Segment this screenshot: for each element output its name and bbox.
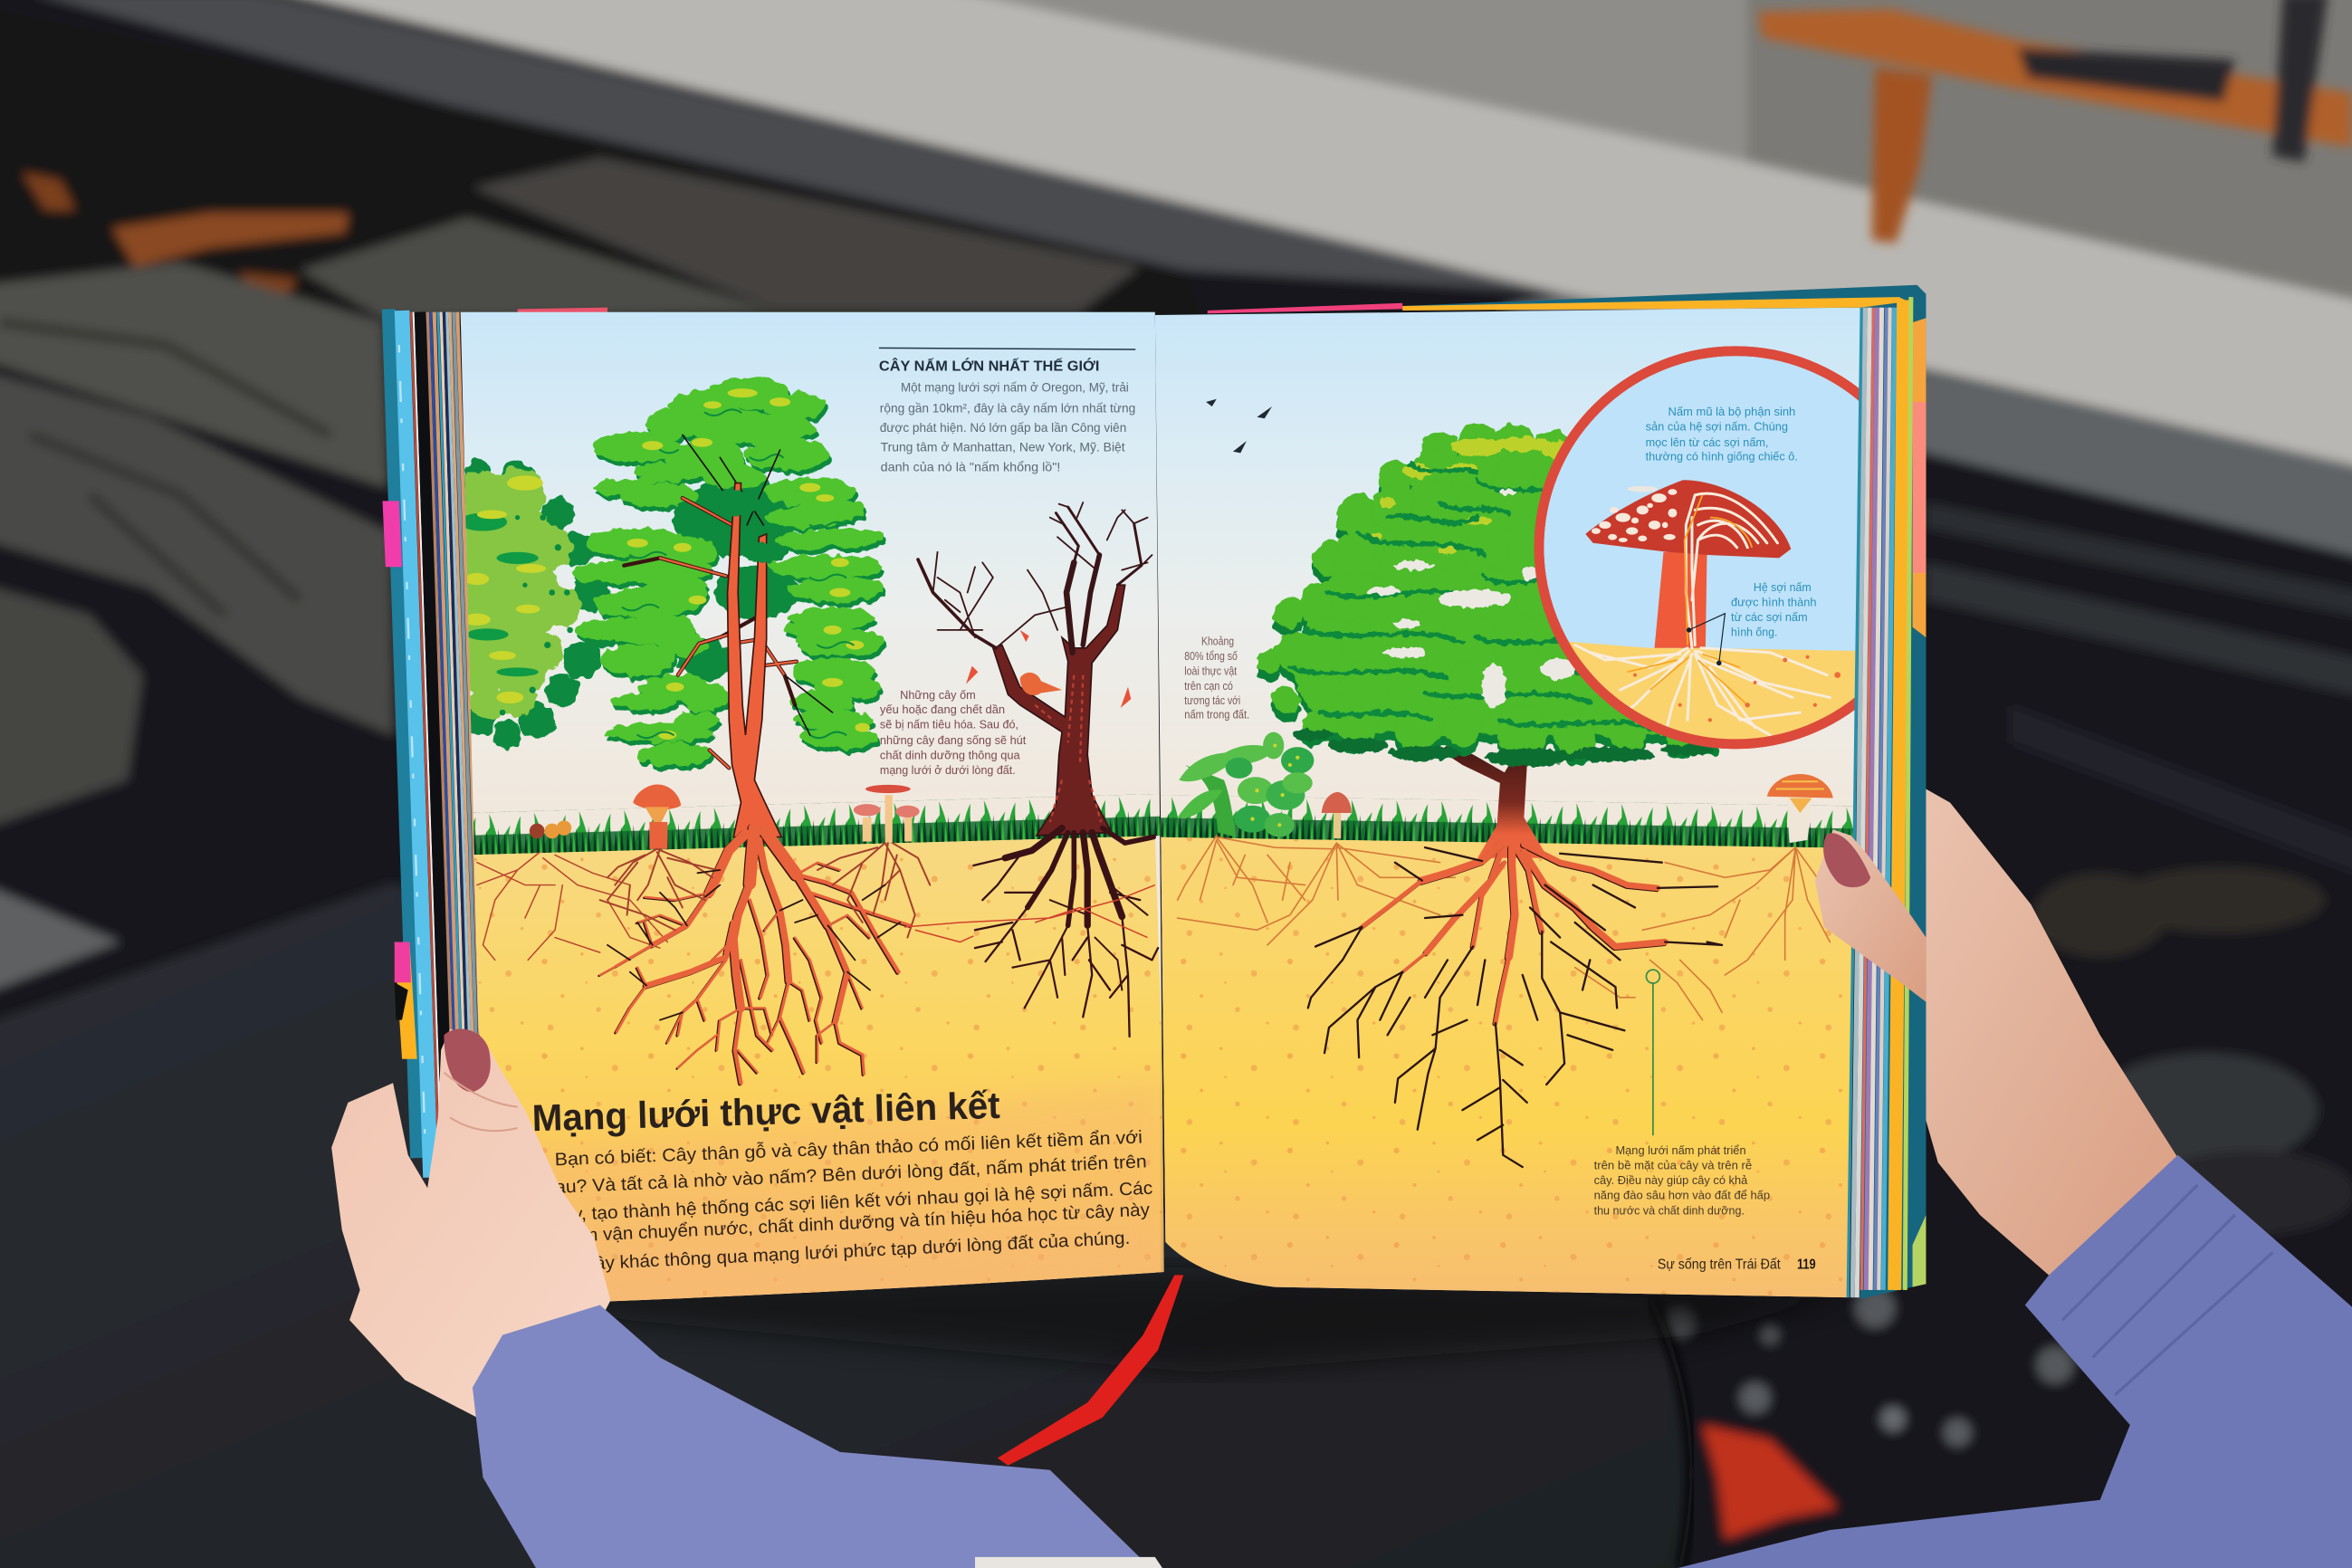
koi left [23,173,75,210]
note: mushroom caps: sản của hệ sợi nấm. Chúng [1646,421,1788,434]
note: fungal network on roots: Mạng lưới nấm phát triển [1615,1144,1746,1157]
note: mycelium: được hình thành [1731,596,1816,608]
note: dying trees: chất dinh dưỡng thông qua [880,749,1020,761]
grey ledge [30,0,1560,292]
note: 80 percent of plants: nấm trong đất. [1184,709,1249,722]
dead tree roots [973,828,1158,1037]
concrete walkway [255,0,2352,468]
foliage light [1257,422,1719,756]
fingernail [1823,833,1870,887]
note: 80 percent of plants: trên cạn có [1184,680,1233,693]
stepping stones [473,158,1140,312]
book shadow [450,1267,1860,1372]
note: 80 percent of plants: 80% tổng số [1184,650,1238,663]
grass strip right page [1147,795,1868,848]
note: 80 percent of plants: tương tác với [1184,694,1240,707]
soil cross section [1530,642,1860,750]
cover salmon block [1913,402,1926,573]
mushroom cap [1585,480,1791,558]
pine branches [624,435,833,768]
note: fungal network on roots: thu nước và chất dinh dưỡng. [1594,1204,1745,1217]
note: mycelium: Hệ sợi nấm [1754,581,1812,594]
cover lime block [1913,1215,1926,1287]
mycelium strands [1575,493,1830,735]
back cover rim [1402,285,1926,1299]
soil dots [1633,655,1840,722]
birds [1206,399,1272,453]
right index finger [1815,829,1926,1002]
dead tree branches [918,502,1152,653]
infobox body: Trung tâm ở Manhattan, New York, Mỹ. Biệt [881,441,1125,454]
oak trunk [1440,735,1548,858]
red connecting filaments [904,885,1155,942]
infobox body [880,380,1135,473]
note: dying trees: yếu hoặc đang chết dần [880,703,1005,716]
mushroom stem [1655,552,1707,648]
right water reflections [2092,1053,2318,1167]
page footer: 119 [1797,1257,1816,1273]
note: dying trees: Những cây ốm [900,689,976,702]
mushroom red cap [633,785,681,849]
dark thin rootlets [1308,847,1722,1167]
left page edge stack [388,309,480,1185]
falling leaves [966,630,1131,708]
note: dying trees: mạng lưới ở dưới lòng đất. [880,764,1016,777]
note: fungal network on roots: cây. Điều này giúp cây có khả [1594,1174,1747,1187]
dead tree trunk [993,585,1125,836]
back wall [930,0,1767,162]
left sleeve [473,1305,1158,1568]
fine orange roots [1178,836,1848,1020]
dark water upper right stripes [1926,502,2352,618]
collar white [975,1557,1167,1568]
infobox body: rộng gần 10km², đây là cây nấm lớn nhất từng [880,402,1135,416]
pine shading squiggles [623,409,854,738]
right mushroom [1767,774,1833,843]
foliage top yellow-green [1370,436,1578,554]
note: mushroom caps [1646,406,1798,464]
note: mushroom caps: mọc lên từ các sợi nấm, [1646,436,1768,449]
note: fungal network on roots [1594,1144,1770,1217]
grass strip left page [465,794,1171,855]
right page edge stack [1848,297,1911,1297]
stone crevices [0,322,330,615]
pine trunks [728,483,781,837]
pine roots [598,828,911,1084]
note: mycelium: hình ống. [1731,626,1777,639]
yellow highlights [627,388,870,740]
infobox body: danh của nó là "nấm khổng lồ"! [881,460,1060,473]
red bookmark ribbon [998,1275,1183,1466]
left hand [331,1028,610,1418]
right page [1147,308,1932,1305]
dead tree [918,502,1152,836]
dark roots thin [607,870,900,1020]
big oak tree [1257,422,1719,858]
thin orange top edge [1402,297,1908,311]
magnified circle [1530,351,1932,750]
note: fungal network on roots: năng đào sâu hơn vào đất để hấp [1594,1190,1770,1202]
sky holes [1368,489,1576,708]
main title: Mạng lưới thực vật liên kết [531,1085,1000,1139]
page gutter shade left [1065,308,1170,1305]
page footer: Sự sống trên Trái Đất [1658,1257,1781,1273]
oak roots [1308,843,1722,1167]
foliage dark [1257,431,1719,765]
main body text: cây, tạo thành hệ thống các sợi liên kết với nhau gọi là hệ sợi nấm. Các [553,1179,1153,1226]
cover pink tabs [383,501,402,567]
note: 80 percent of plants: loài thực vật [1184,665,1238,678]
foliage bottom dark band [1292,729,1715,767]
main body text: Bạn có biết: Cây thân gỗ và cây thân thảo có mối liên kết tiềm ẩn với [554,1126,1143,1170]
bench [1758,0,2352,243]
fine roots of mushrooms [600,843,930,938]
cover pink and yellow tab [395,942,417,1059]
partial tree at far left [464,457,616,751]
note: mushroom caps: thường có hình giống chiếc ô. [1646,451,1798,464]
top pink edge of pages [1208,303,1402,313]
leader line with root-tip circle [1646,970,1659,1135]
fine roots far left [477,852,667,960]
left page [444,308,1171,1305]
note: fungal network on roots: trên bề mặt của cây và trên rễ [1594,1159,1752,1172]
note: 80 percent of plants: Khoảng [1201,635,1234,647]
note: mycelium [1731,581,1816,639]
small plants [1178,732,1314,837]
main body text: nhau? Và tất cả là nhờ vào nấm? Bên dưới lòng đất, nấm phát triển trên [533,1152,1147,1199]
foliage shading squiggles [1290,465,1658,728]
main body text: sang cây khác thông qua mạng lưới phức tạp dưới lòng đất của chúng. [540,1229,1131,1276]
main body text: sợi nấm vận chuyển nước, chất dinh dưỡng và tín hiệu hóa học từ cây này [531,1200,1150,1248]
infobox body: được phát hiện. Nó lớn gấp ba lần Công viên [880,421,1126,435]
right hand back behind the book [1905,789,2178,1278]
cap spots [1592,486,1677,542]
note: dying trees: những cây đang sống sẽ hút [880,734,1027,747]
small mushroom [1322,792,1352,838]
pine tree [571,377,887,837]
right sleeve [1650,1155,2352,1568]
main body text [531,1126,1153,1276]
note: mushroom caps: Nấm mũ là bộ phận sinh [1668,406,1795,418]
mushroom trio [854,785,920,843]
infobox: world's largest fungus [879,348,1135,473]
left dark water [0,7,1200,360]
note: dying trees: sẽ bị nấm tiêu hóa. Sau đó, [880,718,1018,731]
far left mushrooms [530,820,571,838]
circle ring repaint [1539,351,1932,744]
thumbnail [444,1028,491,1092]
pine dark centre [672,479,799,681]
infobox body: Một mạng lưới sợi nấm ở Oregon, Mỹ, trải [901,380,1129,394]
bird [1020,673,1062,695]
dead tree bark [1035,675,1101,822]
open book [383,285,1932,1305]
black round table [0,882,1686,1568]
note: dying trees [880,689,1027,777]
right wall [1747,0,2352,303]
cover orange block [1913,318,1926,637]
foliage over the trunk tops [705,489,788,562]
infobox rule [879,348,1135,349]
infobox heading: CÂY NẤM LỚN NHẤT THẾ GIỚI [879,357,1099,374]
note: 80 percent of plants [1184,635,1249,722]
cuff ribbing [2062,1185,2272,1395]
pointer lines [1688,614,1725,665]
note: mycelium: từ các sợi nấm [1731,611,1808,624]
